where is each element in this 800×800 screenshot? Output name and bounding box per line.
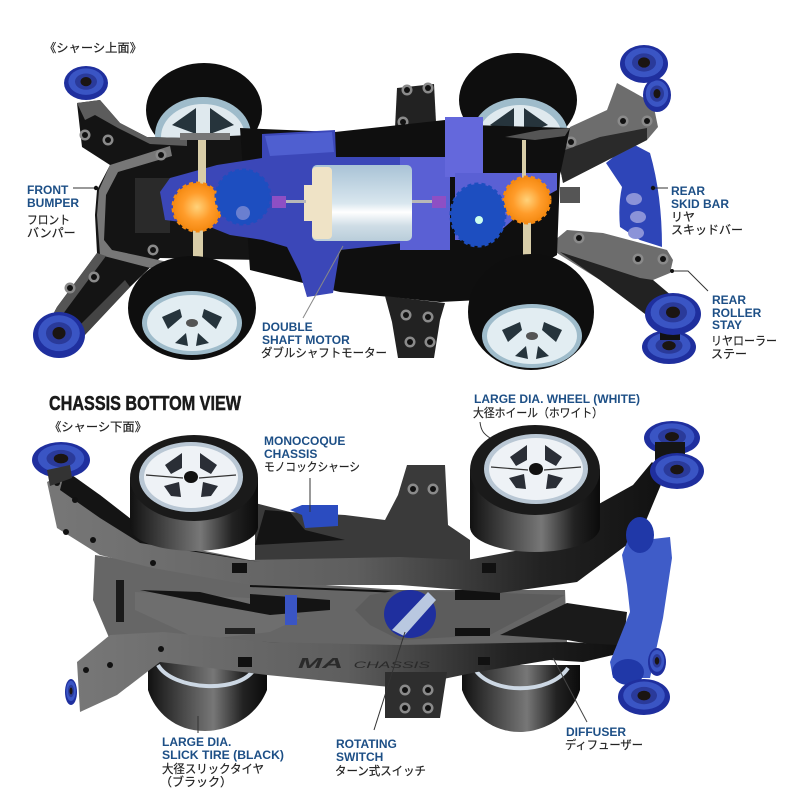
label: large dia. wheel — [473, 392, 640, 438]
monocoque chassis tab — [290, 505, 338, 528]
label: large dia. slick tire: （ブラック） — [160, 774, 232, 789]
label: rotating switch: ターン式スイッチ — [335, 764, 426, 778]
label: front bumper — [27, 183, 98, 240]
rear bracket block — [560, 187, 580, 203]
label: double shaft motor — [261, 246, 387, 360]
label: monocoque chassis — [264, 434, 360, 512]
label: rotating switch: SWITCH — [336, 750, 383, 764]
spur gear: rear blue — [451, 184, 505, 246]
rollers — [33, 45, 701, 364]
chassis mounting tab: top — [395, 82, 436, 128]
illustration: chassis top view — [33, 45, 701, 370]
tire: rear lower — [468, 254, 594, 370]
illustration: chassis bottom view — [32, 421, 704, 732]
tire: lower left — [148, 660, 267, 731]
label: diffuser: DIFFUSER — [566, 725, 626, 739]
label: rear skid bar — [651, 184, 743, 237]
lower dark strut — [500, 603, 627, 650]
subheading: chassis bottom view label: 《シャーシ下面》 — [49, 420, 147, 434]
label: rear roller stay: ROLLER — [712, 306, 762, 320]
label: front bumper: バンパー — [27, 226, 76, 240]
label: front bumper: FRONT — [27, 183, 69, 197]
tire: bottom view upper right — [470, 425, 600, 552]
label: rear skid bar: スキッドバー — [671, 223, 743, 237]
label: double shaft motor: ダブルシャフトモーター — [261, 345, 387, 360]
tire: rear upper — [459, 53, 577, 172]
front bumper — [50, 100, 260, 337]
chassis name marking: MA CHASSIS — [298, 655, 430, 672]
label: front bumper: BUMPER — [27, 196, 79, 210]
label: rear roller stay: リヤローラー — [711, 334, 777, 348]
chassis spine and mounting tab: upper — [255, 465, 470, 565]
label: front bumper: フロント — [27, 213, 70, 227]
label: rear roller stay: ステー — [711, 347, 747, 361]
label: double shaft motor: SHAFT MOTOR — [262, 333, 350, 347]
front axle bracket — [180, 133, 230, 140]
label: large dia. wheel: LARGE DIA. WHEEL (WHITE) — [474, 392, 640, 406]
label: rear roller stay: REAR — [712, 293, 746, 307]
lower chassis rail — [77, 632, 617, 712]
axle: rear — [522, 140, 531, 262]
label: rear roller stay: STAY — [712, 318, 742, 332]
upper rail shadow strip — [60, 470, 260, 562]
label: diffuser: ディフューザー — [565, 737, 643, 752]
rotating switch — [384, 590, 436, 638]
tire: front lower — [128, 256, 256, 360]
chassis body — [240, 120, 570, 302]
rim arcs: lower wheels — [158, 665, 568, 688]
label: rotating switch: ROTATING — [336, 737, 397, 751]
rollers: bottom view — [32, 421, 704, 715]
label: monocoque chassis: CHASSIS — [264, 447, 317, 461]
label: large dia. wheel: 大径ホイール（ホワイト） — [473, 406, 603, 420]
rotating switch plate — [355, 590, 565, 640]
heading: chassis top view label: 《シャーシ上面》 — [44, 41, 142, 55]
label: monocoque chassis: モノコックシャーシ — [264, 460, 360, 474]
label: large dia. slick tire: 大径スリックタイヤ — [162, 762, 264, 776]
chassis mounting tab: bottom — [385, 296, 445, 358]
label: large dia. slick tire: LARGE DIA. — [162, 735, 231, 749]
tire: front upper — [146, 63, 262, 173]
fastening holes — [54, 480, 496, 673]
crown gear: front orange — [173, 183, 221, 231]
heading: chassis bottom view: CHASSIS BOTTOM VIEW — [49, 393, 241, 415]
upper chassis rail — [47, 462, 665, 593]
rear roller stay: lower — [555, 230, 673, 320]
bottom view skid bar — [610, 517, 672, 685]
label: large dia. slick tire — [160, 716, 284, 789]
pinion gears: purple — [272, 196, 446, 208]
double shaft motor — [272, 165, 442, 241]
crown gear: rear orange — [504, 177, 550, 223]
label: monocoque chassis: MONOCOQUE — [264, 434, 345, 448]
motor mount: blue — [160, 117, 557, 297]
center plate — [93, 555, 567, 650]
tire: bottom view upper left — [130, 435, 258, 551]
skid bar screws — [626, 193, 646, 239]
label: double shaft motor: DOUBLE — [262, 320, 313, 334]
label: large dia. slick tire: SLICK TIRE (BLACK) — [162, 748, 284, 762]
axle: front — [193, 140, 206, 262]
rear axle bracket — [505, 128, 570, 140]
label: rear skid bar: リヤ — [671, 210, 695, 224]
label: rear skid bar: SKID BAR — [671, 197, 729, 211]
label: diffuser — [553, 658, 643, 752]
tire: lower right — [462, 665, 580, 732]
spur gear: front blue — [216, 170, 270, 224]
rear skid bar — [606, 143, 662, 247]
rear roller stay: upper — [557, 83, 658, 183]
label: rear roller stay — [670, 269, 777, 361]
label: rotating switch — [335, 632, 426, 778]
chassis mounting tab: lower — [385, 672, 447, 718]
label: rear skid bar: REAR — [671, 184, 705, 198]
